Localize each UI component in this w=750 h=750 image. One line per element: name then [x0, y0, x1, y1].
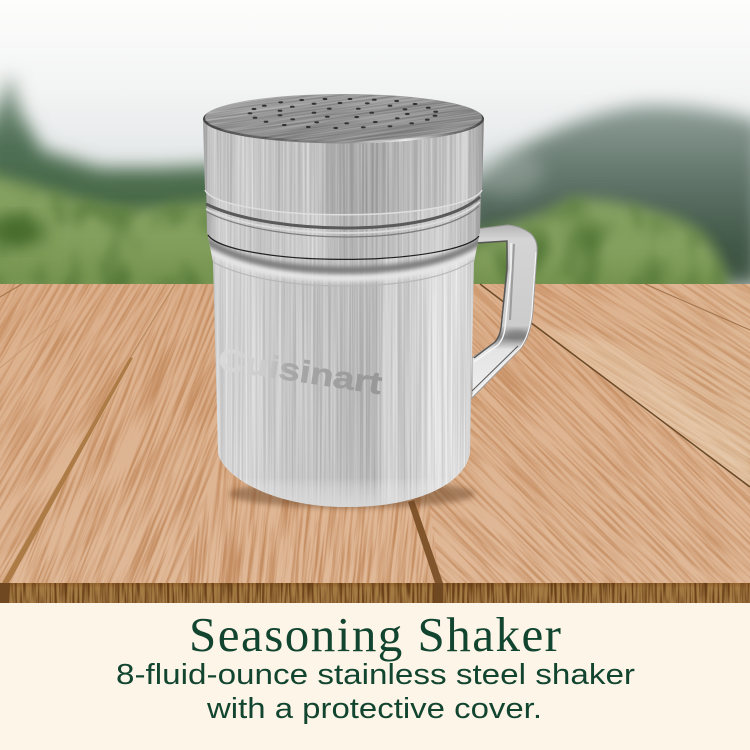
plank gap: left thick — [2, 357, 133, 583]
groove lower line — [207, 206, 479, 237]
blurred landscape background — [0, 0, 750, 295]
soft crack left — [0, 320, 58, 368]
product: seasoning shaker — [203, 94, 538, 511]
left green bushes — [0, 172, 230, 295]
left forested hill — [0, 72, 225, 250]
handle bend shadow — [506, 330, 528, 340]
light streak on right plank — [540, 326, 750, 487]
table top — [0, 284, 750, 584]
lid top brushed texture — [204, 94, 482, 142]
plank gap: centre — [408, 500, 443, 583]
description line 1: 8-fluid-ounce stainless steel shaker — [116, 659, 635, 691]
body brushed texture — [213, 244, 474, 502]
hill haze — [467, 148, 543, 196]
description line 2: with a protective cover. — [206, 693, 542, 725]
collar ring — [206, 193, 481, 260]
sky — [0, 0, 750, 290]
collar shadow line — [208, 235, 479, 259]
body cylinder — [208, 236, 479, 507]
handle outer edge — [472, 252, 536, 396]
panel background — [0, 603, 750, 750]
body bead ring — [205, 240, 482, 286]
body base highlight — [213, 262, 474, 507]
handle inner shade — [510, 244, 514, 320]
plank gap: left thin — [130, 284, 175, 358]
handle band — [472, 225, 537, 398]
plank gap: right long — [480, 284, 750, 487]
grain: centre plank left — [8, 284, 270, 583]
table front edge — [0, 583, 750, 603]
brand logo: Cuisinart — [216, 341, 384, 401]
lid top plate — [205, 94, 482, 141]
contact shadow — [229, 480, 475, 508]
lid rim — [203, 94, 484, 144]
shaker holes — [248, 98, 438, 129]
grain: left plank — [0, 284, 176, 583]
grain: right plank — [480, 284, 750, 487]
grain: front plank — [400, 284, 750, 583]
wooden table — [0, 284, 750, 603]
groove bright — [206, 202, 480, 233]
handle lower shadow line — [472, 346, 518, 391]
handle — [472, 225, 537, 398]
right misty hill — [465, 106, 750, 285]
left dark hollow — [0, 218, 47, 246]
lid lower highlight — [205, 190, 482, 215]
title: Seasoning Shaker — [189, 607, 561, 662]
bead lower edge — [213, 260, 474, 286]
plank: right — [480, 284, 750, 487]
right green bushes — [465, 199, 730, 295]
handle inner edge — [474, 241, 507, 358]
plank gap: far left — [0, 284, 22, 297]
collar texture — [206, 193, 478, 259]
bead bright band — [205, 247, 482, 278]
bead dark band — [205, 240, 482, 270]
lid — [203, 94, 484, 216]
front edge gaps — [0, 583, 443, 603]
lid side wall — [203, 120, 484, 215]
front edge grain — [0, 583, 750, 603]
lid side texture — [203, 118, 485, 220]
plank gap: right far — [645, 284, 750, 330]
collar band — [206, 190, 481, 260]
grain: centre plank right — [180, 284, 440, 583]
caption panel — [0, 603, 750, 750]
shaker body — [205, 235, 485, 510]
handle inner highlight — [474, 243, 511, 362]
groove dark — [206, 197, 480, 228]
